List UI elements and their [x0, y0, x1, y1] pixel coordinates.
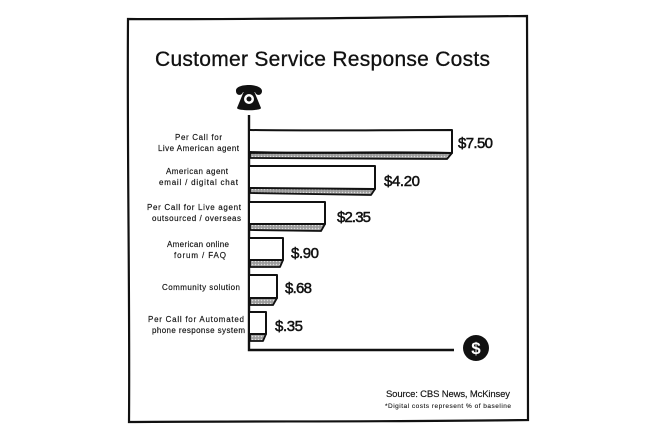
footnote: *Digital costs represent % of baseline	[385, 403, 511, 410]
bar: online forum / FAQ	[250, 238, 283, 267]
chart axes	[249, 115, 454, 350]
value: $2.35: $2.35	[337, 209, 371, 226]
panel: frame	[128, 16, 528, 422]
bar: automated phone response	[250, 312, 266, 341]
icon: telephone	[236, 85, 262, 110]
label: email / digital chat: American agent	[166, 167, 229, 176]
source: Source: CBS News, McKinsey	[386, 389, 510, 400]
bar: outsourced / overseas	[250, 202, 325, 231]
label: outsourced / overseas: Per Call for Live agent	[147, 203, 242, 212]
label: email / digital chat	[159, 167, 239, 187]
label: community solution: Community solution	[162, 283, 240, 292]
label: Live American agent: Live American agent	[158, 144, 240, 153]
label: outsourced / overseas: outsourced / overseas	[152, 214, 241, 223]
value: $.90: $.90	[291, 245, 319, 262]
label: online forum / FAQ: forum / FAQ	[174, 251, 226, 260]
label: automated phone response	[148, 315, 245, 335]
bar: Live American agent	[250, 130, 452, 159]
icon: dollar coin	[463, 335, 489, 361]
value: $.35: $.35	[275, 318, 303, 335]
bar: community solution	[250, 275, 277, 305]
bar: email / digital chat	[250, 166, 375, 195]
label: email / digital chat: email / digital chat	[159, 178, 239, 187]
label: automated phone response: Per Call for Automated	[148, 315, 244, 324]
label: Live American agent	[158, 133, 240, 153]
label: online forum / FAQ	[167, 240, 230, 260]
label: automated phone response: phone response system	[152, 326, 245, 335]
label: outsourced / overseas	[147, 203, 242, 223]
title: Customer Service Response Costs	[155, 48, 490, 71]
label: online forum / FAQ: American online	[167, 240, 230, 249]
value: $4.20: $4.20	[384, 173, 420, 190]
value: $.68: $.68	[285, 280, 312, 297]
value: $7.50: $7.50	[458, 135, 493, 152]
icon: dollar coin: $	[471, 339, 481, 358]
label: Live American agent: Per Call for	[175, 133, 222, 142]
